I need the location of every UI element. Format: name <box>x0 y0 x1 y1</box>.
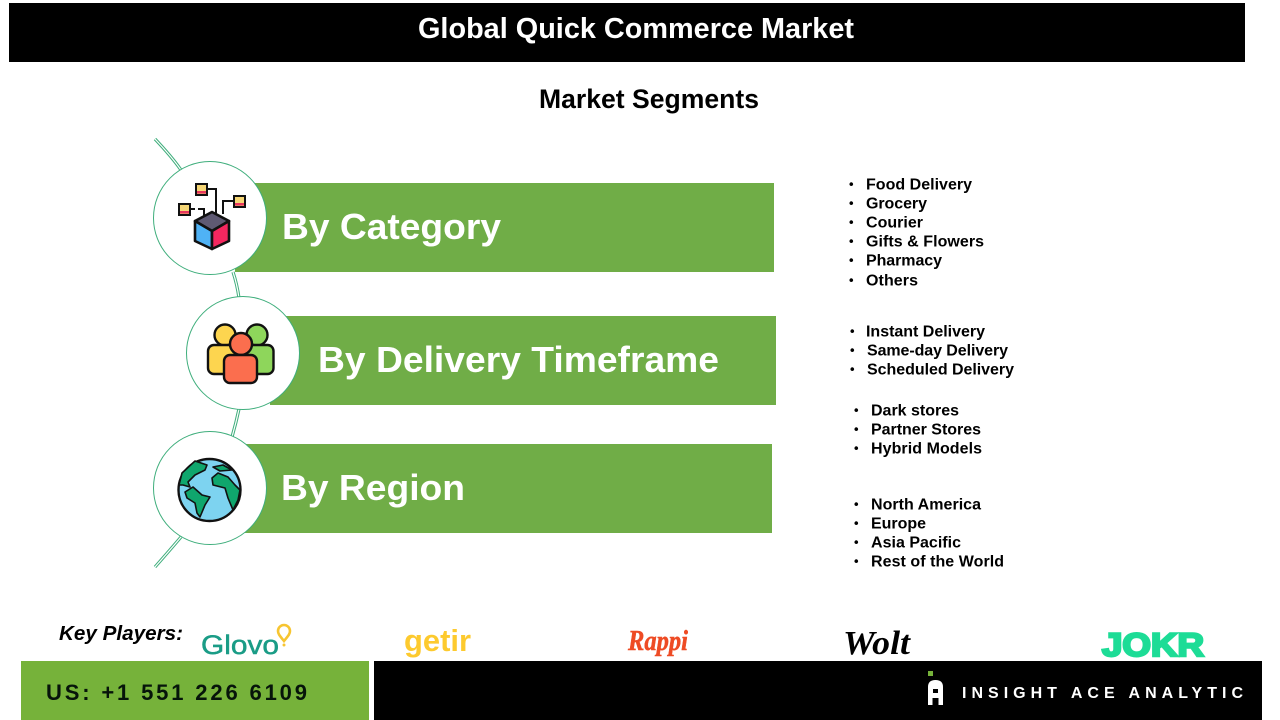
list: region items: • <box>854 534 859 550</box>
category label: By Category <box>282 206 501 247</box>
list: category items: Grocery <box>866 196 927 212</box>
list: store model items: • <box>854 402 859 418</box>
icon: cube with tags <box>179 184 245 249</box>
footer: phone panel: US: +1 551 226 6109 <box>46 680 307 705</box>
title banner <box>9 3 1245 62</box>
list: store model items: Partner Stores <box>871 422 981 438</box>
list: category items <box>849 176 984 290</box>
delivery bar <box>270 316 776 405</box>
list: category items: Pharmacy <box>866 252 942 270</box>
logo: rappi: Rappi <box>627 626 688 657</box>
list: category items: • <box>849 176 854 192</box>
list: category items: • <box>849 234 854 248</box>
list: category items: Courier <box>866 214 923 232</box>
list: delivery timeframe items: Same-day Delivery <box>867 342 1008 360</box>
list: delivery timeframe items: • <box>850 342 855 358</box>
footer: brand panel <box>374 661 1262 720</box>
list: delivery timeframe items: • <box>850 324 855 338</box>
list: store model items <box>854 402 982 458</box>
list: region items: Asia Pacific <box>871 534 961 552</box>
icon: insight ace logo <box>928 671 943 705</box>
list: region items: Rest of the World <box>871 554 1004 570</box>
list: category items: • <box>849 252 854 268</box>
heading: market segments: Market Segments <box>539 84 759 114</box>
panel: by delivery timeframe <box>186 296 776 410</box>
logo: glovo: Glovo <box>201 630 279 660</box>
footer: phone panel <box>21 661 369 720</box>
list: delivery timeframe items: Instant Delivery <box>866 324 985 340</box>
logo: glovo <box>201 625 290 660</box>
list: region items: • <box>854 554 859 568</box>
panel: by category <box>154 162 774 274</box>
list: region items: North America <box>871 496 981 514</box>
list: category items: Others <box>866 272 918 290</box>
list: delivery timeframe items: Scheduled Delivery <box>867 362 1014 378</box>
list: store model items: • <box>854 422 859 436</box>
title banner: Global Quick Commerce Market <box>418 13 854 45</box>
brand name: INSIGHT ACE ANALYTIC <box>962 685 1243 702</box>
logo: wolt: Wolt <box>843 625 912 662</box>
list: store model items: Hybrid Models <box>871 440 982 458</box>
region circle <box>154 432 266 544</box>
category bar <box>235 183 774 272</box>
list: category items: • <box>849 272 854 288</box>
category circle <box>154 162 266 274</box>
logo: getir: getir <box>404 623 471 658</box>
key players label: Key Players: <box>59 623 183 645</box>
list: region items <box>854 496 1004 570</box>
list: store model items: Dark stores <box>871 402 959 420</box>
list: region items: • <box>854 516 859 530</box>
icon: globe <box>178 459 240 521</box>
delivery circle <box>186 296 300 410</box>
list: category items: Gifts & Flowers <box>866 234 984 250</box>
panel: by region <box>154 432 772 544</box>
icon: three people <box>208 324 274 383</box>
list: delivery timeframe items: • <box>850 362 855 376</box>
logo: jokr: JOKR <box>1102 627 1204 663</box>
connector arc <box>155 139 239 567</box>
list: category items: • <box>849 214 854 230</box>
list: delivery timeframe items <box>850 324 1014 378</box>
list: category items: Food Delivery <box>866 176 972 194</box>
list: category items: • <box>849 196 854 210</box>
region label: By Region <box>281 467 465 508</box>
list: region items: Europe <box>871 516 926 532</box>
region bar <box>240 444 772 533</box>
delivery label: By Delivery Timeframe <box>318 339 719 380</box>
list: region items: • <box>854 496 859 512</box>
list: store model items: • <box>854 440 859 456</box>
